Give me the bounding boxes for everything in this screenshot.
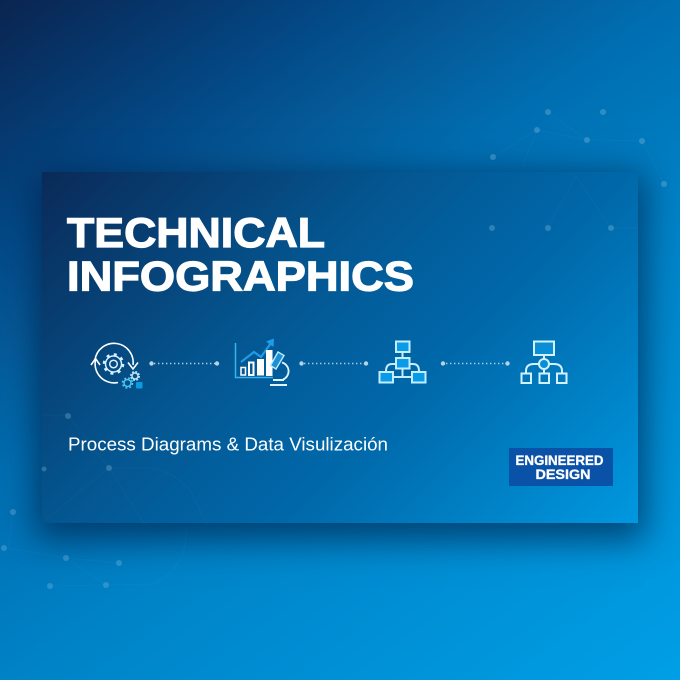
title [67,209,414,300]
connector 1 [149,361,219,366]
icon: bar chart with microscope [236,338,289,385]
title: TECHNICAL [67,209,325,256]
panel: main card [42,172,638,523]
network pattern: top right [489,109,667,231]
network pattern: bottom left [1,413,207,589]
icon: process cycle with gears [91,343,142,388]
badge: DESIGN [536,467,590,482]
subtitle: Process Diagrams & Data Visulización [68,434,388,454]
icon: flow chart [380,342,426,382]
icon: hierarchy [522,342,566,383]
connector 3 [441,361,510,366]
badge: ENGINEERED [516,453,604,468]
connector 2 [299,361,368,366]
badge [509,448,613,486]
title: INFOGRAPHICS [67,252,414,300]
